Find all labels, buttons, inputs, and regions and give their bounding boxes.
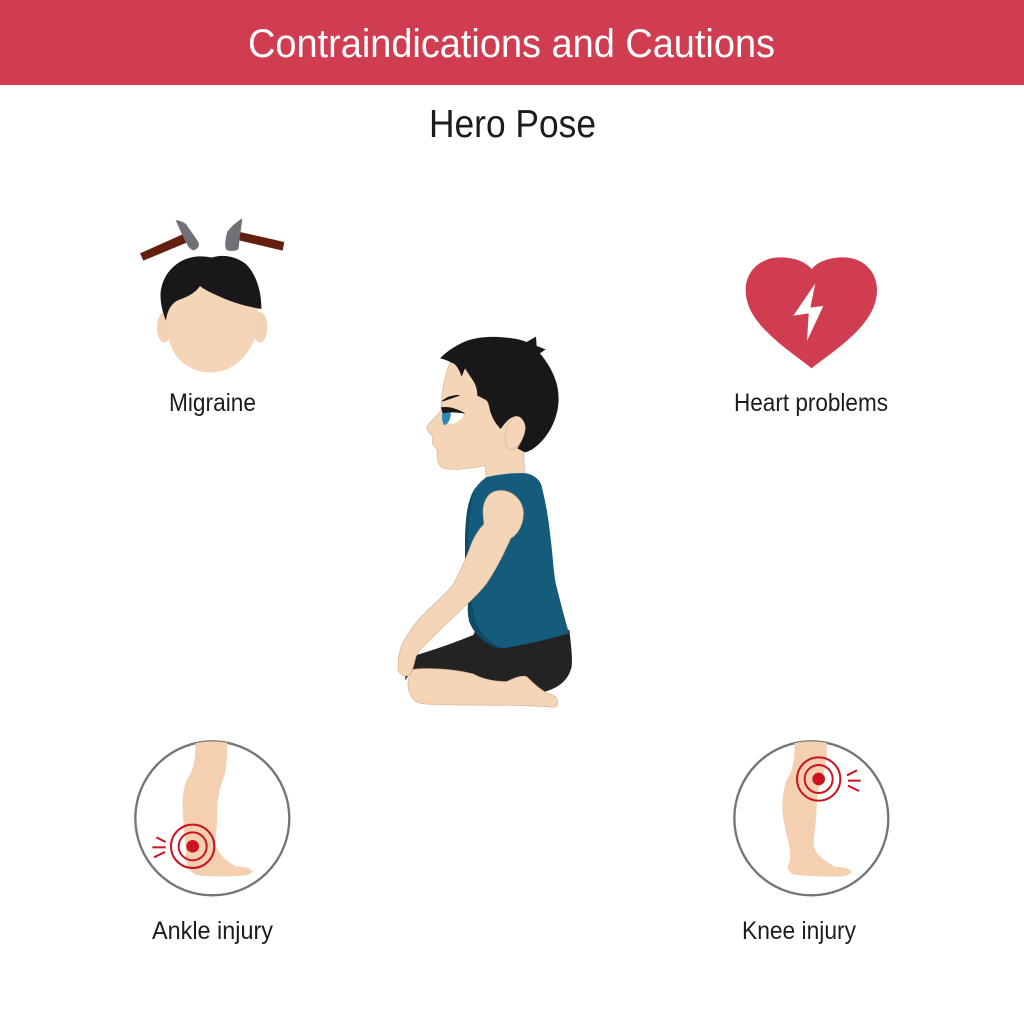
- left hammer: [140, 220, 199, 261]
- title banner: [0, 0, 1024, 85]
- label: Migraine: Migraine: [169, 389, 256, 417]
- hair: [440, 337, 559, 452]
- hair: [161, 256, 261, 321]
- leg: [782, 740, 852, 877]
- sleeveless shirt: [465, 473, 569, 648]
- eyebrow: [442, 395, 459, 401]
- icon: knee injury circle: [734, 740, 888, 895]
- ear: [505, 416, 525, 450]
- leg: [182, 740, 253, 876]
- pain lines: [152, 837, 166, 857]
- arm: [398, 491, 523, 676]
- face: [166, 270, 258, 372]
- eye: [441, 407, 466, 425]
- shorts: [405, 620, 572, 692]
- label: Heart problems: Heart problems: [734, 389, 888, 417]
- neck and head skin: [427, 362, 527, 480]
- pain target: [797, 757, 840, 801]
- pain lines: [847, 770, 861, 791]
- pain target: [171, 825, 214, 868]
- folded leg and foot: [408, 669, 558, 707]
- label: Knee injury: Knee injury: [742, 917, 856, 945]
- label: Ankle injury: Ankle injury: [152, 917, 273, 945]
- icon: ankle injury circle: [135, 740, 289, 895]
- central figure: seated hero pose: [398, 337, 572, 707]
- title banner: Contraindications and Cautions: [248, 22, 775, 66]
- right hammer: [225, 218, 284, 251]
- shirt side shading: [465, 488, 503, 648]
- ears: [157, 312, 267, 343]
- icon: heart with lightning bolt: [746, 257, 877, 368]
- subtitle: Hero Pose: Hero Pose: [429, 103, 596, 146]
- icon: migraine head with hammers: [140, 218, 284, 372]
